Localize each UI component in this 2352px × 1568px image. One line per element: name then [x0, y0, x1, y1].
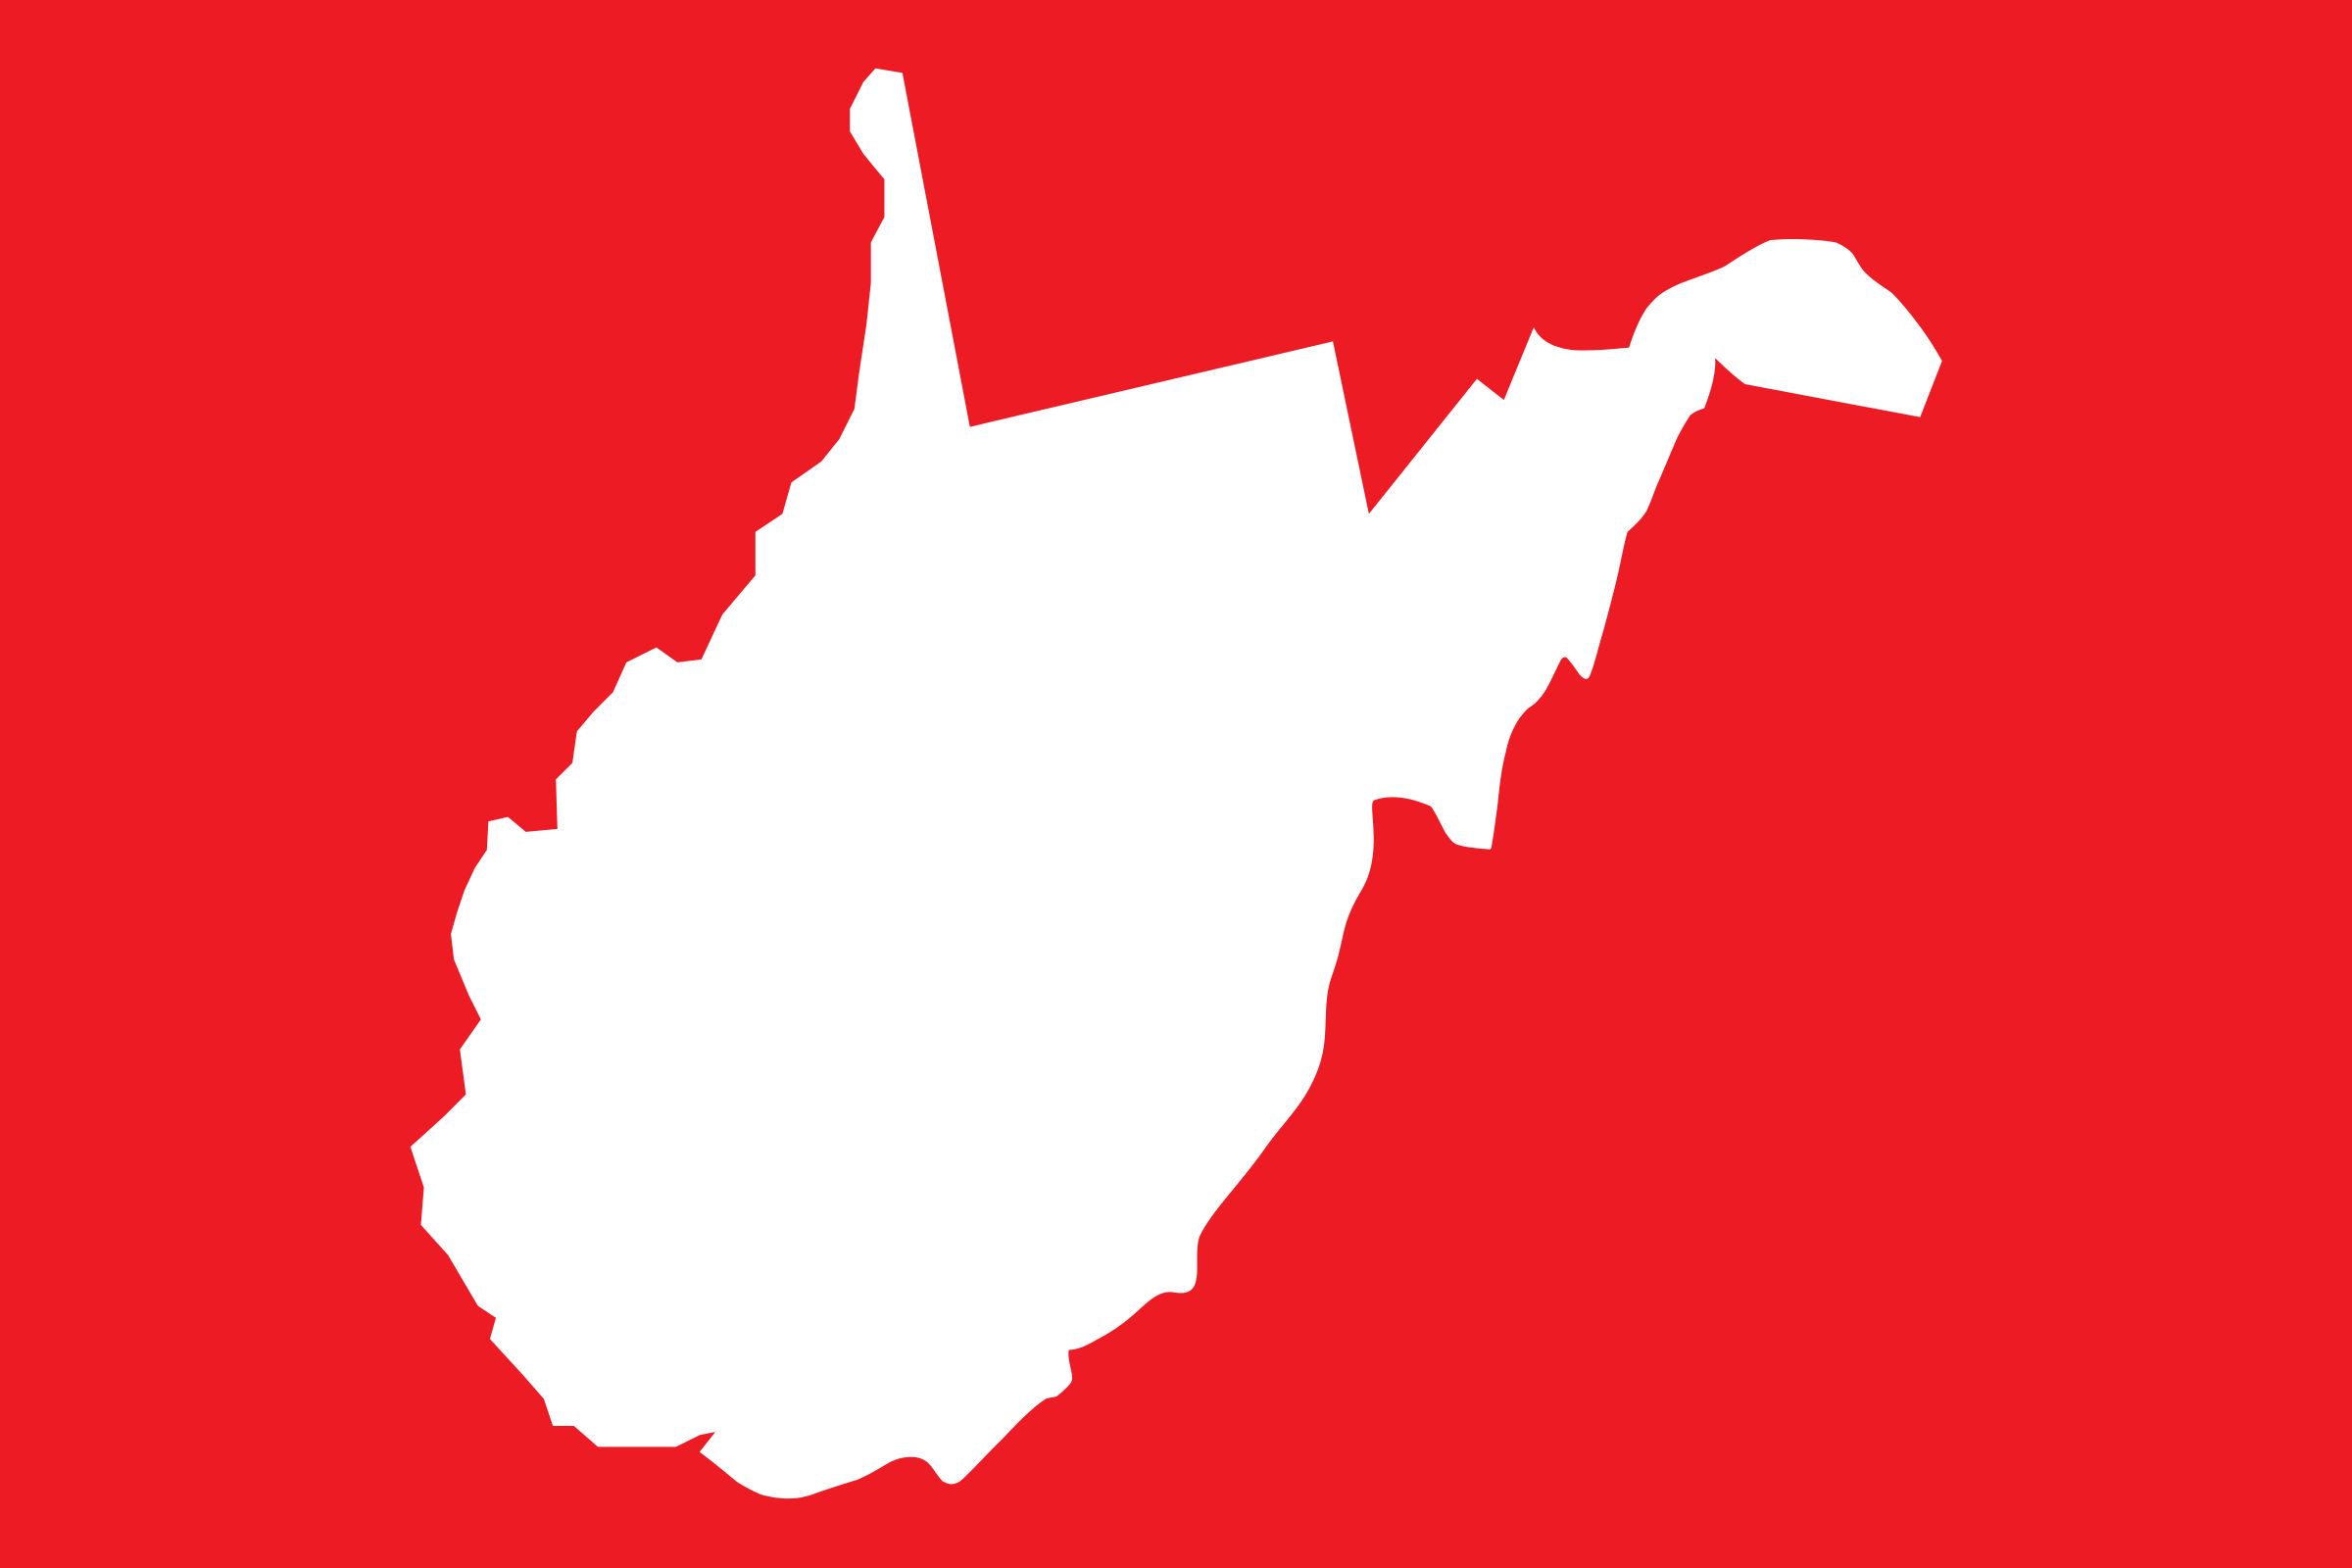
icon: West Virginia state map [411, 69, 1942, 1498]
